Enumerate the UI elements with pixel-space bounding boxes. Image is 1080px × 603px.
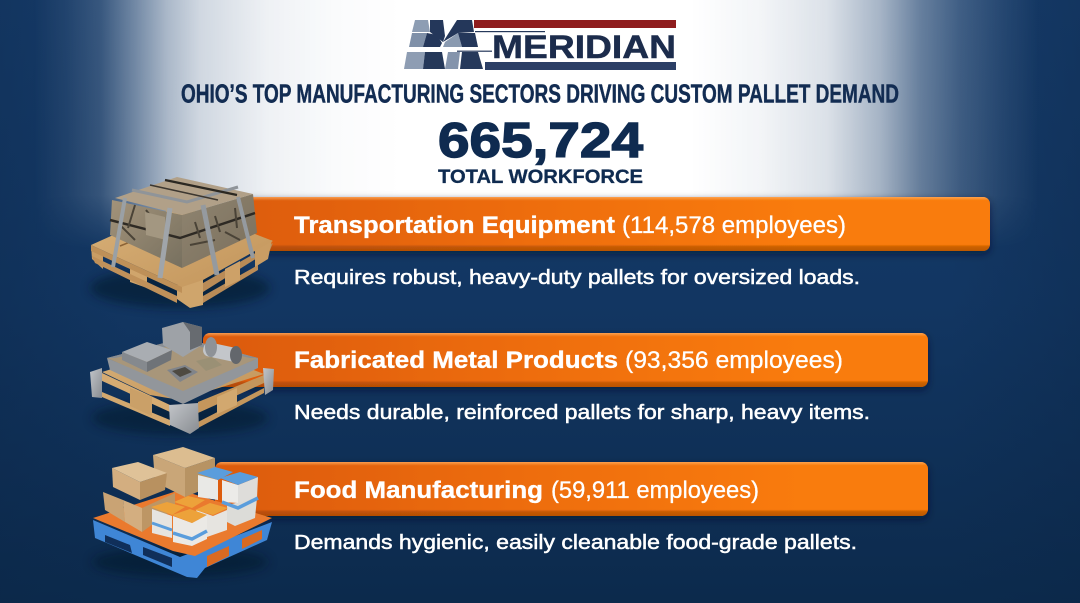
blue-lid tubs bbox=[198, 475, 218, 500]
panel: fabricated metal products bbox=[90, 322, 928, 435]
sector heading: (59,911 employees) bbox=[551, 477, 759, 504]
logo wordmark: MERIDIAN bbox=[492, 29, 676, 65]
orange bar bbox=[245, 197, 990, 251]
metal corner brackets bbox=[90, 368, 102, 398]
total workforce stat bbox=[438, 114, 643, 188]
straps bbox=[132, 187, 238, 202]
sector heading bbox=[294, 477, 759, 504]
stat label: TOTAL WORKFORCE bbox=[438, 167, 643, 188]
metal tray bbox=[107, 338, 258, 393]
logo navy bar bbox=[485, 62, 676, 70]
icon: reinforced pallet with steel parts bbox=[90, 322, 274, 435]
front cardboard boxes bbox=[103, 492, 125, 522]
pallet deck bbox=[91, 205, 273, 287]
back cardboard box bbox=[153, 455, 185, 497]
orange bar bbox=[203, 333, 928, 387]
sector heading: (93,356 employees) bbox=[625, 347, 843, 374]
steel plate stack bbox=[122, 342, 172, 362]
sector heading: Fabricated Metal Products bbox=[294, 347, 618, 374]
cylinder part bbox=[202, 341, 240, 363]
icon: plastic pallet with boxes and food containers bbox=[92, 447, 272, 578]
sector heading bbox=[294, 347, 843, 374]
panel: transportation equipment bbox=[90, 177, 990, 308]
logo red bar bbox=[474, 20, 676, 28]
sector heading bbox=[294, 212, 846, 239]
icon: wooden pallet with strapped stone load bbox=[90, 177, 273, 308]
stone load bbox=[110, 200, 182, 268]
orange-lid tubs bbox=[174, 496, 205, 508]
sector description: Requires robust, heavy-duty pallets for oversized loads. bbox=[294, 267, 860, 289]
sector description: Demands hygienic, easily cleanable food-grade pallets. bbox=[294, 532, 857, 554]
panel: food manufacturing bbox=[92, 447, 928, 578]
pallet body bbox=[93, 520, 272, 578]
logo mark bbox=[404, 20, 545, 69]
big number: 665,724 bbox=[438, 114, 643, 168]
sector description: Needs durable, reinforced pallets for sharp, heavy items. bbox=[294, 402, 870, 424]
pallet feet and rails bbox=[91, 246, 103, 269]
logo: Meridian bbox=[404, 20, 676, 70]
sector heading: Food Manufacturing bbox=[294, 477, 543, 504]
sector heading: (114,578 employees) bbox=[622, 212, 846, 239]
small parts bbox=[167, 365, 198, 382]
orange bar bbox=[215, 462, 928, 516]
pallet wood bbox=[100, 372, 170, 412]
sector heading: Transportation Equipment bbox=[294, 212, 615, 239]
steel block bbox=[162, 322, 202, 357]
